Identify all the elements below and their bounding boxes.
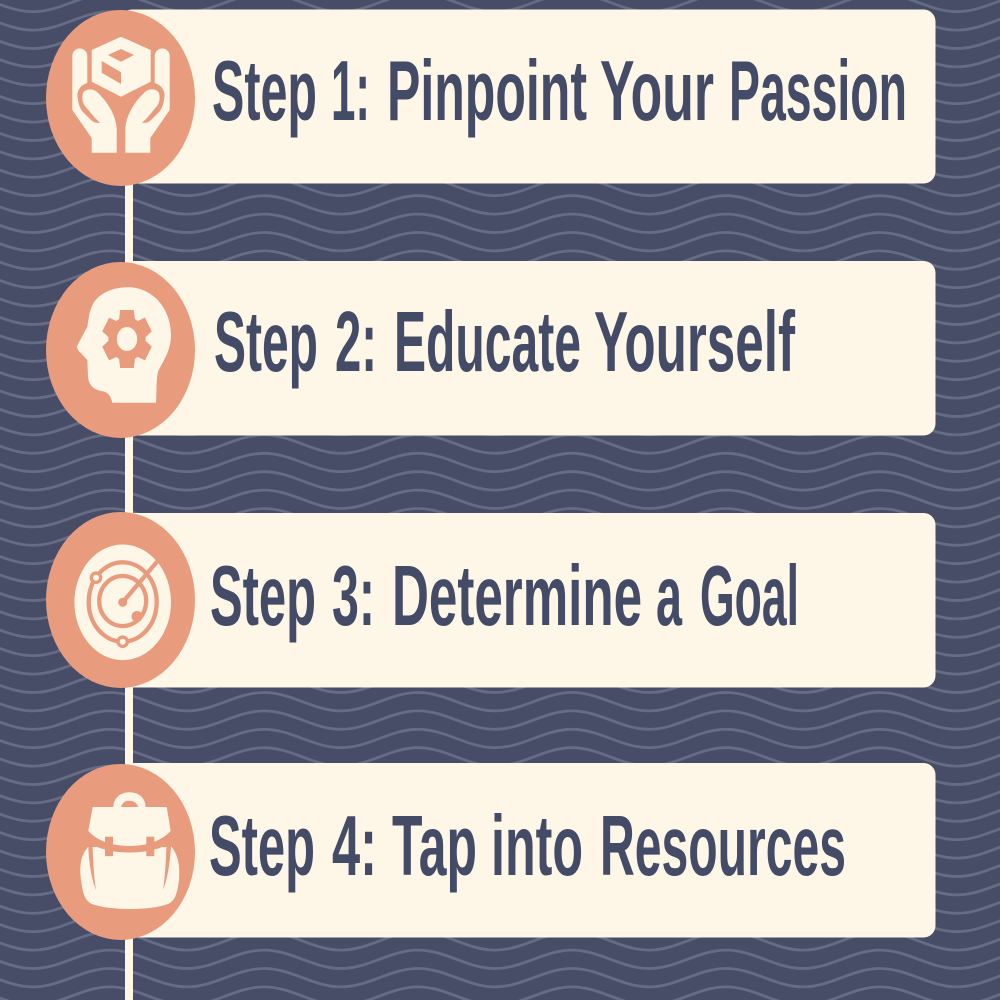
step 4 heading: [209, 799, 846, 894]
step 3 heading: Goal: [700, 549, 799, 644]
step 4 heading: Tap: [392, 799, 477, 894]
step 3 heading: Determine: [392, 549, 642, 644]
step 2 heading: [214, 295, 795, 390]
panel: step 1 card: [120, 10, 936, 184]
step 3 heading: Step: [210, 549, 316, 644]
icon: radar target: [74, 544, 171, 660]
icon: head with gear: [77, 287, 171, 403]
timeline vertical line: [125, 180, 133, 1000]
step 1 heading: Pinpoint: [387, 44, 587, 139]
icon: backpack: [80, 792, 179, 909]
step 2 heading: Step: [214, 295, 318, 390]
step 1 heading: Your: [600, 44, 714, 139]
step 3 heading: [210, 549, 799, 644]
step 1 heading: Step: [212, 44, 317, 139]
icon: hands holding a box: [72, 37, 170, 153]
panel: step 4 card: [120, 763, 936, 938]
step 3 badge circle: [46, 512, 195, 688]
step 3 heading: 3:: [332, 549, 375, 644]
step 2 heading: Yourself: [594, 295, 795, 390]
panel: step 2 card: [120, 261, 936, 436]
step 2 badge circle: [46, 262, 195, 438]
step 1 heading: [212, 44, 907, 139]
step 1: [46, 10, 936, 186]
panel: step 3 card: [120, 513, 936, 688]
step 2: [46, 261, 936, 438]
step 1 heading: 1:: [331, 44, 370, 139]
step 3 heading: a: [656, 549, 682, 644]
step 4: [46, 763, 936, 940]
step 4 heading: into: [491, 799, 583, 894]
step 1 badge circle: [46, 10, 195, 186]
step 4 heading: 4:: [332, 799, 377, 894]
step 3: [46, 512, 936, 688]
step 2 heading: Educate: [394, 295, 581, 390]
step 4 heading: Step: [209, 799, 315, 894]
step 2 heading: 2:: [335, 295, 377, 390]
step 4 badge circle: [46, 764, 195, 940]
